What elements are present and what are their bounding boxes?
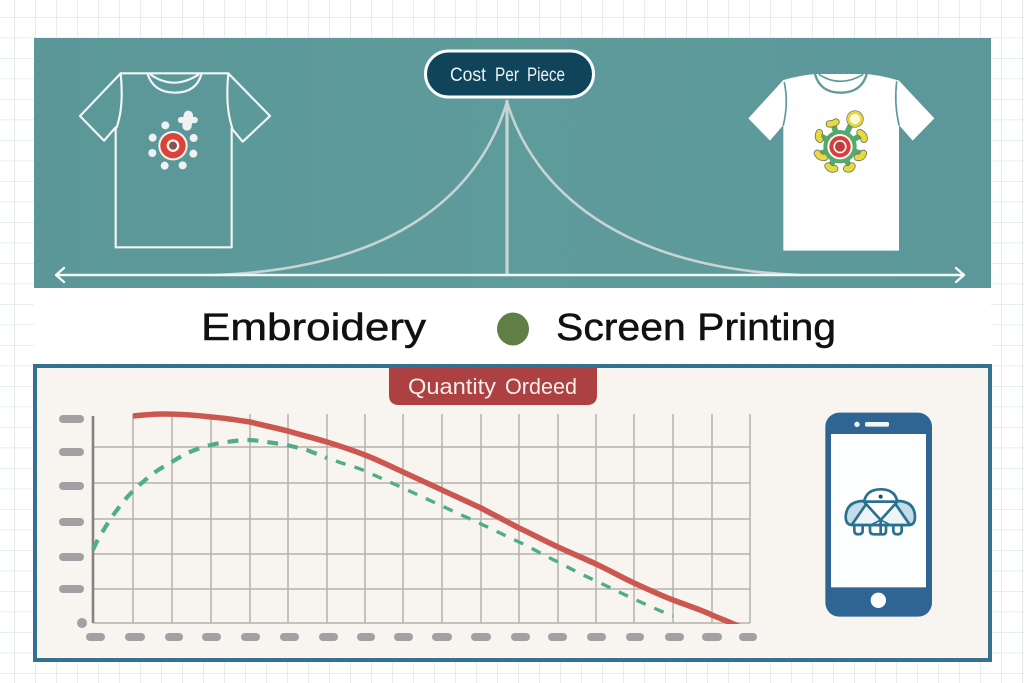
legend marker: green dot: [497, 312, 529, 346]
y axis labels: [59, 415, 87, 628]
icon: outlined embroidery t-shirt: [80, 73, 270, 247]
heading tab: quantity ordered: Ordeed: [505, 374, 577, 399]
icon: green virus-like print: [817, 111, 864, 169]
heading pill: cost per piece: Per: [495, 65, 520, 86]
legend label: embroidery: Embroidery: [201, 307, 426, 349]
icon: turtle logo: [846, 489, 915, 534]
legend label: screen printing: Screen Printing: [556, 307, 836, 349]
x axis labels: [86, 633, 757, 641]
line chart: [59, 414, 757, 641]
panel: legend band: [34, 288, 991, 363]
y axis: [92, 416, 94, 623]
icon: smartphone with turtle logo: [825, 413, 932, 617]
red solid curve: embroidery: [133, 414, 740, 627]
green dashed curve: screen printing: [93, 440, 673, 616]
panel: quantity ordered chart: [35, 366, 990, 660]
heading tab: quantity ordered: [389, 368, 597, 405]
panel: cost per piece: [34, 38, 991, 288]
heading tab: quantity ordered: Quantity: [408, 374, 496, 399]
arrow: horizontal axis: [56, 268, 964, 282]
heading pill: cost per piece: Cost: [450, 65, 487, 86]
heading pill: cost per piece: [426, 51, 594, 97]
diagram: converging cost curves: [215, 100, 800, 275]
heading pill: cost per piece: Piece: [527, 65, 565, 86]
icon: white screen-printed t-shirt: [748, 74, 934, 251]
